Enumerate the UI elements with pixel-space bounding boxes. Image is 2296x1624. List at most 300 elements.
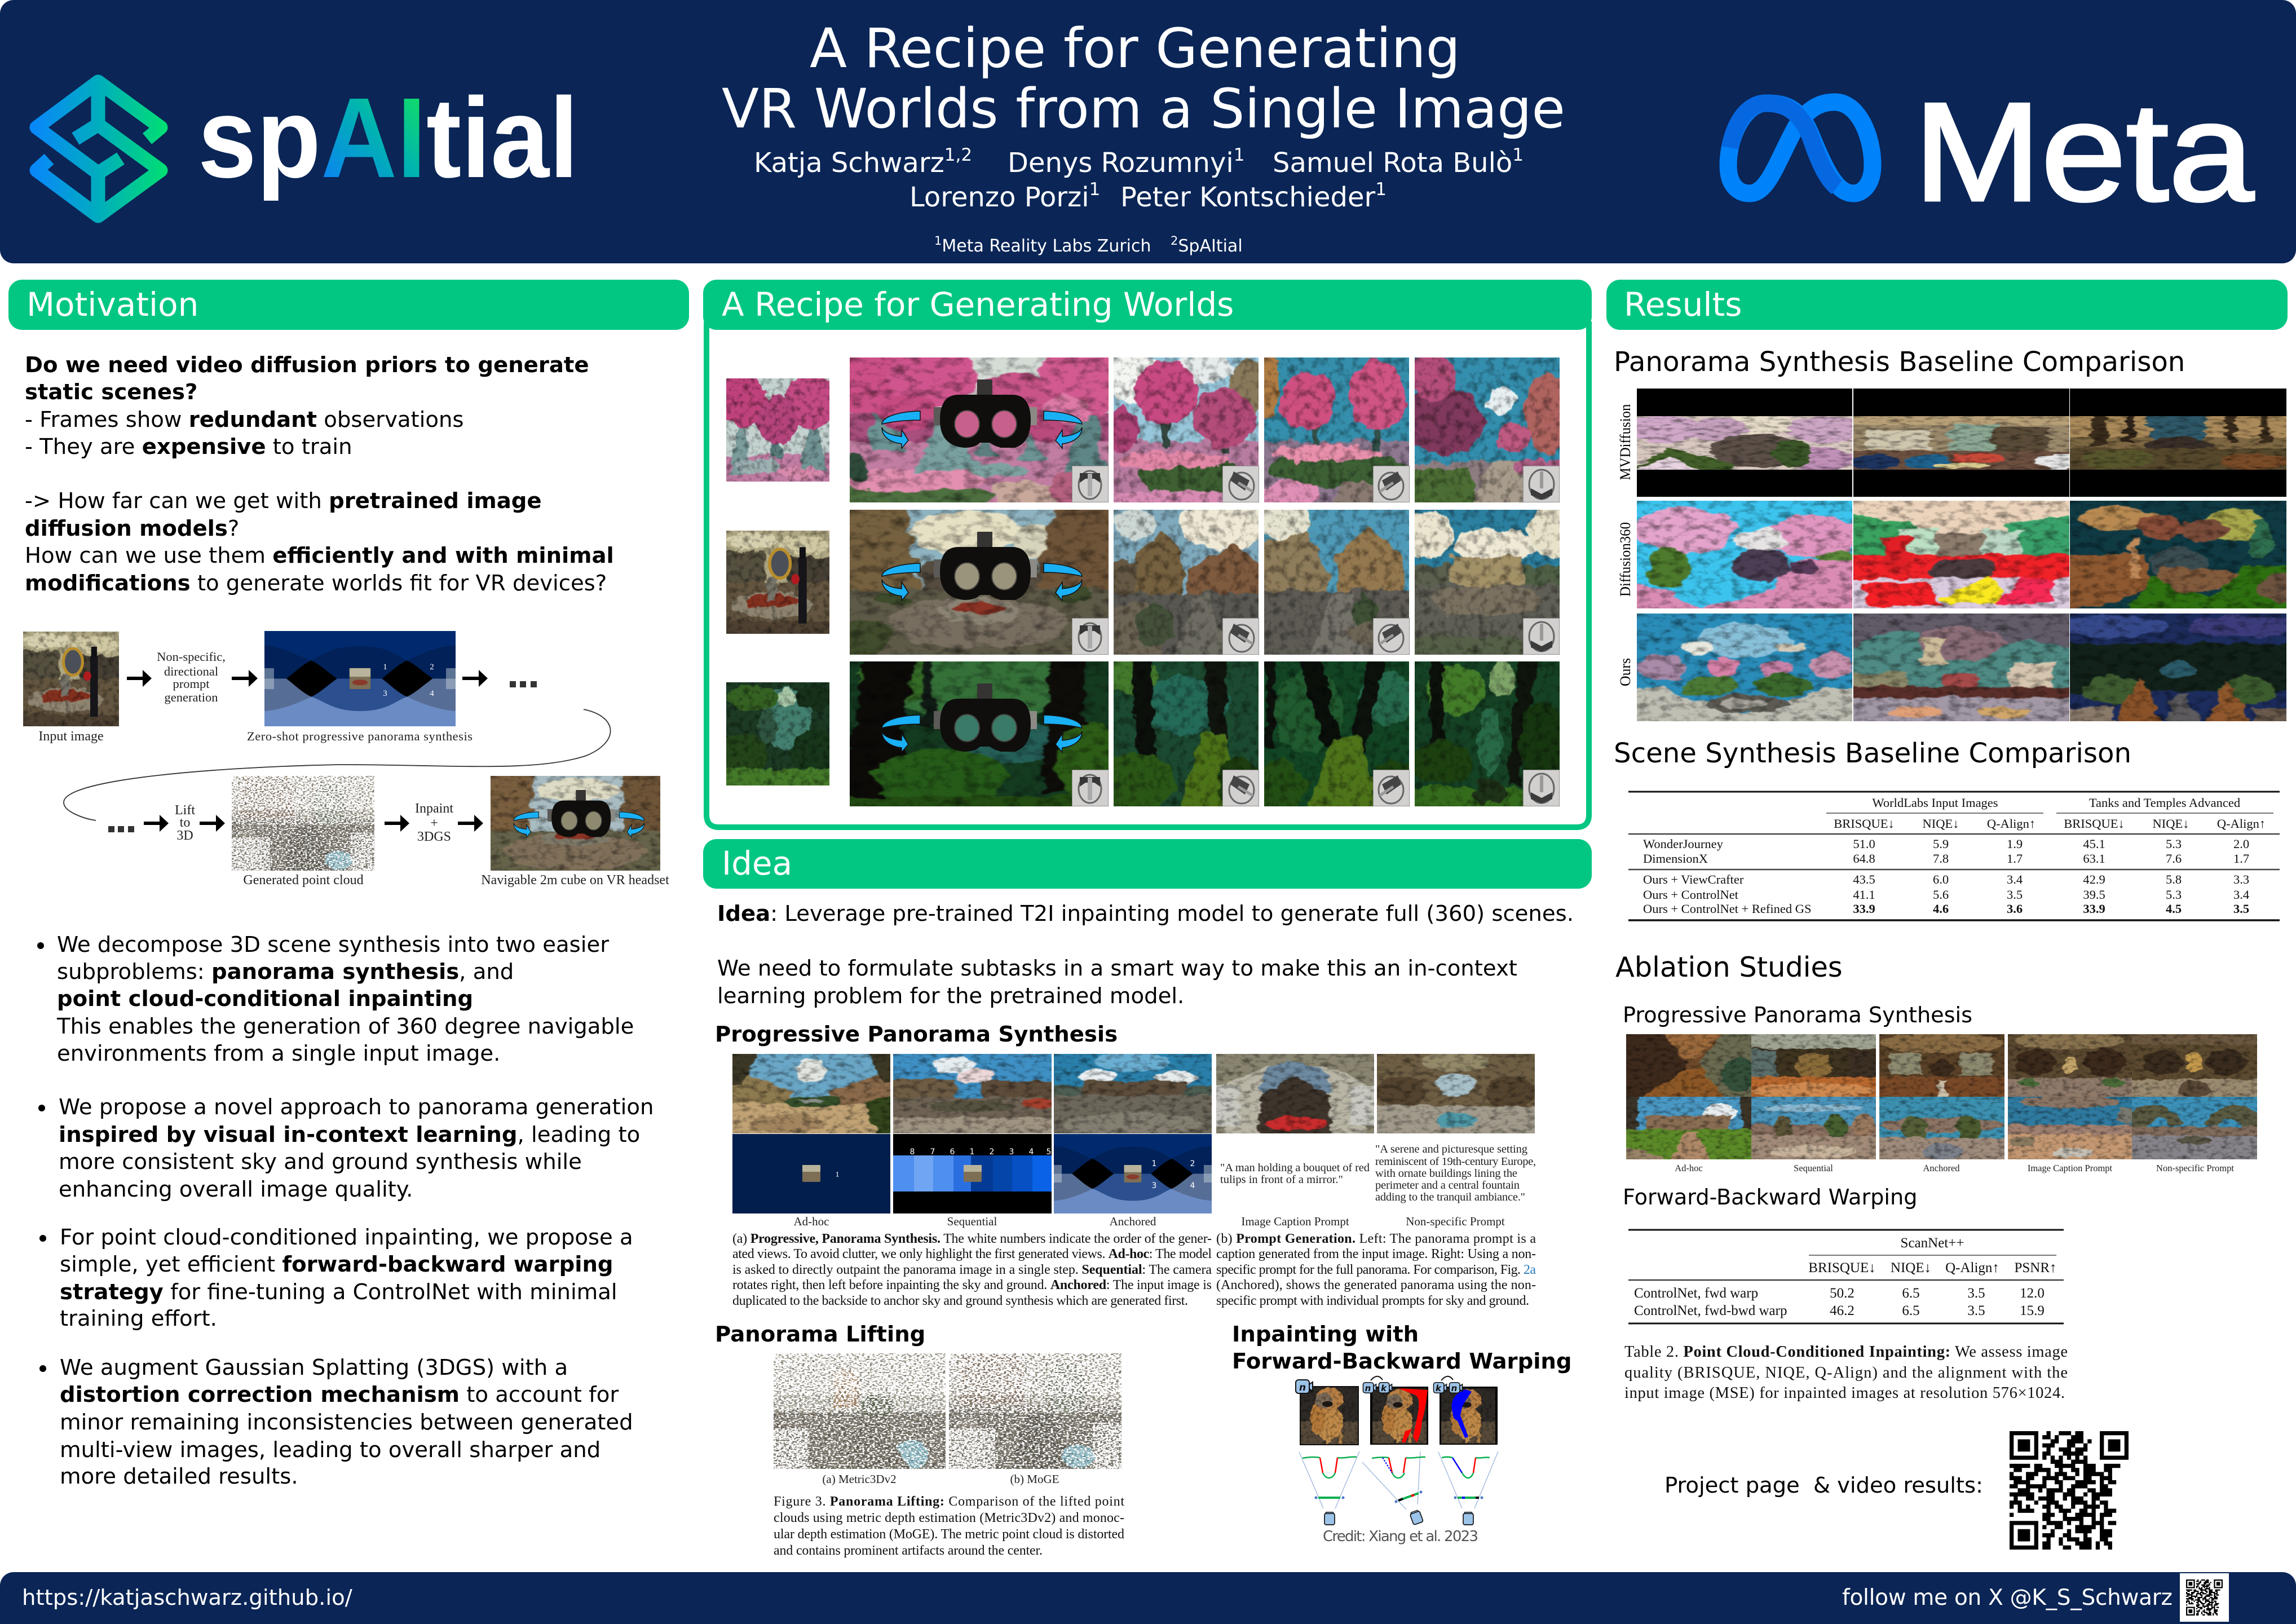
table: scene synthesis results: 43.5 [1853, 872, 1875, 886]
image: anchored mask: 3 [1152, 1181, 1156, 1190]
section heading: Results [1606, 280, 2288, 330]
affiliation: SpAItial: 2 [1171, 234, 1178, 248]
diagram: reference geometry [1299, 1451, 1359, 1508]
arrow [127, 670, 152, 687]
table: scene synthesis results: 5.3 [2166, 837, 2182, 851]
caption: figure 3: and contains prominent artifacts around the center. [774, 1543, 1043, 1558]
authors: 1,2 [944, 145, 972, 165]
sublabels: ablation: Image Caption Prompt [2028, 1163, 2113, 1173]
image: ablation sequential desert [1739, 1091, 1888, 1166]
image: input image [14, 622, 129, 736]
icon: cameras k n with arrow: k [1436, 1383, 1442, 1393]
table: scene synthesis results: 3.6 [2007, 902, 2023, 916]
table: scene synthesis results: WonderJourney [1643, 837, 1724, 851]
figure: panorama lifting [757, 1336, 1139, 1558]
caption: progressive panorama synthesis: ated views. To avoid clutter, we only highlight the first generated views. Ad-hoc: The model [732, 1247, 1212, 1261]
table: forward-backward warping: 6.5 [1902, 1303, 1920, 1318]
image: forest view 3 [1264, 661, 1409, 806]
figure: ablation panoramas [1614, 1028, 2269, 1173]
bullet: panorama generation: inspired by visual in-context learning, leading to [59, 1122, 640, 1148]
image grid: row 3 forest scene [716, 647, 1574, 821]
table: scene synthesis results: 3.3 [2233, 872, 2249, 886]
footer banner [0, 1572, 2296, 1624]
image: ablation caption prompt desert [1995, 1091, 2144, 1166]
label: prompt generation: directional [164, 664, 218, 678]
icon: cameras n k with arrow: k [1381, 1383, 1387, 1393]
sublabel: Metric3Dv2: (a) Metric3Dv2 [822, 1472, 897, 1486]
image: sequential mask: 3 [1009, 1148, 1014, 1157]
authors: Samuel Rota Bulò [1273, 147, 1512, 179]
image: forward warped dog with red holes [1367, 1383, 1432, 1449]
image: plaza view 4 [1415, 510, 1560, 655]
sublabels: variants: Non-specific Prompt [1406, 1215, 1505, 1228]
image: blossom view 4 [1415, 358, 1560, 502]
image: sequential mask: 8 [910, 1148, 915, 1157]
caption: table 2 [1624, 1343, 2068, 1402]
table: scene synthesis results: BRISQUE↓ [2064, 817, 2125, 831]
table: scene synthesis results: 4.6 [1933, 902, 1949, 916]
caption: figure 3: clouds using metric depth estimation (Metric3Dv2) and monoc- [774, 1511, 1124, 1525]
caption: prompt generation [1216, 1232, 1536, 1308]
arrow [462, 670, 488, 687]
wordmark: Meta: Meta [1914, 73, 2254, 230]
arrow [458, 815, 483, 832]
label: prompt generation: Non-specific, [157, 650, 226, 664]
sublabels: variants: Image Caption Prompt [1241, 1215, 1349, 1228]
arrow [144, 815, 169, 832]
sublabels: variants [794, 1215, 1505, 1228]
caption: progressive panorama synthesis: (a) Progressive, Panorama Synthesis. The white numbers indicate the order of the gener- [732, 1232, 1212, 1246]
label: lift to 3D [175, 803, 195, 843]
table: scene synthesis results: 51.0 [1853, 837, 1875, 851]
icon: cameras n k with arrow: n [1365, 1383, 1371, 1393]
bullet: decomposition: We decompose 3D scene synthesis into two easier [57, 932, 609, 957]
label: inpaint + 3DGS [415, 801, 453, 844]
authors: Denys Rozumnyi [1008, 147, 1234, 179]
icon: footer QR code [2180, 1573, 2229, 1622]
table: scene synthesis results: 1.9 [2007, 837, 2023, 851]
table: forward-backward warping: 15.9 [2020, 1303, 2045, 1318]
authors: 1 [1375, 179, 1387, 200]
footer link: https://katjaschwarz.github.io/ [22, 1585, 352, 1610]
bullet: panorama generation: enhancing overall image quality. [59, 1177, 413, 1202]
table: forward-backward warping: 6.5 [1902, 1286, 1920, 1301]
image: anchored mask [1054, 1134, 1212, 1213]
image: ablation non-specific desert [2120, 1091, 2269, 1166]
image: MVDiffusion forest [2048, 389, 2296, 497]
image grid: row 1 blossom scene [716, 340, 1574, 517]
caption: table 2: Table 2. Point Cloud-Conditioned Inpainting: We assess image [1624, 1343, 2068, 1361]
table: forward-backward warping: 50.2 [1830, 1286, 1855, 1301]
image: ad-hoc mask [732, 1134, 890, 1213]
table: scene synthesis results: 3.5 [2007, 888, 2023, 902]
table: scene synthesis results: 5.3 [2166, 888, 2182, 902]
label: lift to 3D: to [180, 815, 190, 830]
sublabels: variants: Sequential [947, 1215, 997, 1228]
caption: navigable cube: Navigable 2m cube on VR headset [481, 873, 669, 888]
image: ablation non-specific library [2120, 1028, 2269, 1103]
subheading: Progressive Panorama Synthesis: Progressive Panorama Synthesis [1623, 1003, 1972, 1028]
wordmark: spAItial: spAItial [198, 74, 579, 201]
image grid: row 2 plaza scene [716, 495, 1574, 669]
label: inpaint + 3DGS: + [430, 816, 438, 831]
table: scene synthesis results: DimensionX [1643, 851, 1708, 866]
text block: idea statement [717, 901, 1574, 1009]
table: scene synthesis results: 2.0 [2233, 837, 2249, 851]
image: Ours room [1832, 603, 2091, 732]
label: prompt generation: generation [165, 690, 218, 704]
pipeline diagram [14, 622, 677, 888]
table: forward-backward warping: ScanNet++ [1901, 1235, 1964, 1251]
table: forward-backward warping: 3.5 [1967, 1286, 1985, 1301]
table: scene synthesis results: 3.5 [2233, 902, 2249, 916]
caption: panorama synthesis: Zero-shot progressive panorama synthesis [247, 729, 473, 743]
table: scene synthesis results: 41.1 [1853, 888, 1875, 902]
section heading: Idea: Idea [722, 844, 792, 882]
image: plaza main view [850, 510, 1109, 655]
sublabels: ablation: Sequential [1794, 1163, 1833, 1173]
ellipsis [108, 826, 134, 832]
image: non-specific prompt panorama [1361, 1046, 1551, 1141]
image: forest view 2 [1114, 661, 1259, 806]
table: scene synthesis results: 5.6 [1933, 888, 1949, 902]
bullet: decomposition [37, 932, 634, 1066]
image: plaza view 3 [1264, 510, 1409, 655]
section heading: Motivation [8, 280, 689, 330]
image: MVDiffusion room [1832, 389, 2091, 497]
image: ablation anchored desert [1867, 1091, 2017, 1166]
authors: Katja Schwarz [754, 147, 944, 179]
image: sequential mask: 6 [950, 1148, 955, 1157]
authors [754, 145, 1524, 213]
bullet: inpainting: training effort. [60, 1306, 217, 1331]
caption: point cloud: Generated point cloud [243, 873, 364, 888]
credit: Credit: Xiang et al. 2023 [1323, 1528, 1478, 1545]
text block: questions: static scenes? [25, 379, 197, 405]
image: blossom input [726, 378, 829, 482]
icon: Meta infinity loop [1728, 102, 1873, 193]
header banner [0, 0, 2296, 263]
image: anchored panorama mask [264, 631, 456, 726]
table: scene synthesis results: 45.1 [2083, 837, 2105, 851]
caption text: non-specific prompt: with ornate buildings lining the [1375, 1167, 1517, 1180]
bullet: 3DGS: We augment Gaussian Splatting (3DGS) with a [60, 1355, 568, 1380]
title: A Recipe for Generating [810, 16, 1460, 80]
caption text: non-specific prompt: perimeter and a central fountain [1375, 1179, 1520, 1191]
icon: camera k tilted [1410, 1510, 1423, 1525]
image: anchored panorama mask: 3 [383, 689, 387, 698]
table: scene synthesis results: Ours + ViewCrafter [1643, 872, 1744, 886]
image: source dog view [1295, 1381, 1364, 1450]
icon: cameras n k with arrow [1363, 1376, 1392, 1393]
image: MVDiffusion blossom [1615, 389, 1874, 497]
image: anchored mask: 1 [1152, 1159, 1156, 1168]
section heading: Motivation: Motivation [27, 285, 198, 324]
bullet: panorama generation [38, 1095, 654, 1202]
footer handle: follow me on X @K_S_Schwarz [1842, 1585, 2173, 1610]
text block: questions: How can we use them efficiently and with minimal [25, 543, 614, 568]
table: scene synthesis results: BRISQUE↓ [1834, 817, 1895, 831]
table: forward-backward warping: Q-Align↑ [1945, 1260, 1999, 1276]
caption text: non-specific prompt: reminiscent of 19th-century Europe, [1375, 1155, 1536, 1168]
panel border [707, 321, 1589, 827]
bullet: decomposition: point cloud-conditional inpainting [57, 986, 473, 1012]
authors: Lorenzo Porzi [909, 182, 1089, 213]
label: lift to 3D: Lift [175, 803, 195, 818]
text block: idea statement: Idea: Leverage pre-trained T2I inpainting model to generate full (360) scenes. [717, 901, 1574, 926]
image: forest view 4 [1415, 661, 1560, 806]
bullet: inpainting: simple, yet efficient forward-backward warping [60, 1252, 613, 1277]
subheading: Forward-Backward Warping: Forward-Backward Warping [1623, 1185, 1917, 1210]
table: forward-backward warping: PSNR↑ [2014, 1260, 2057, 1276]
caption: figure 3: ular depth estimation (MoGE). The metric point cloud is distorted [774, 1527, 1124, 1542]
heading: Panorama Lifting: Panorama Lifting [715, 1322, 925, 1347]
row label: Ours: Ours [1617, 658, 1633, 686]
arrow [200, 815, 225, 832]
bullet: decomposition: environments from a single input image. [57, 1041, 500, 1066]
table: scene synthesis results: 5.9 [1933, 837, 1949, 851]
text block: idea statement: We need to formulate subtasks in a smart way to make this an in-context [717, 956, 1517, 981]
table: scene synthesis results: 64.8 [1853, 851, 1875, 866]
image: ablation ad-hoc fantasy [1614, 1091, 1764, 1166]
table: scene synthesis results: 5.8 [2166, 872, 2182, 886]
label: lift to 3D: 3D [176, 828, 193, 843]
text block: questions [25, 352, 614, 596]
sublabels: ablation [1675, 1163, 2234, 1173]
section heading: recipe: A Recipe for Generating Worlds [722, 285, 1234, 324]
bullet: inpainting [39, 1225, 633, 1331]
panel: Results [1606, 280, 2296, 1547]
image: sequential mask [893, 1134, 1052, 1213]
icon: view insets row 1 [1072, 466, 1560, 502]
image: image caption prompt panorama [1200, 1046, 1390, 1141]
table: scene synthesis results: 39.5 [2083, 888, 2105, 902]
caption: prompt generation: specific prompt with individual prompts for sky and ground. [1216, 1294, 1529, 1308]
image: ablation ad-hoc library [1614, 1028, 1764, 1103]
caption: figure 3 [774, 1494, 1124, 1558]
label: project page: Project page & video results: [1664, 1473, 1983, 1498]
table: forward-backward warping: 12.0 [2020, 1286, 2045, 1301]
caption text: image caption prompt: tulips in front of a mirror." [1220, 1173, 1343, 1186]
table: scene synthesis results: Q-Align↑ [2217, 817, 2266, 831]
icon: headset overlay row 1 [882, 379, 1082, 448]
title [722, 16, 1565, 140]
icon: camera below warped-back [1463, 1512, 1473, 1525]
panel: Motivation [8, 280, 689, 1489]
caption: prompt generation: (b) Prompt Generation. Left: The panorama prompt is a [1216, 1232, 1536, 1246]
table: scene synthesis results: Ours + ControlNet + Refined GS [1643, 902, 1811, 916]
caption text: non-specific prompt: "A serene and picturesque setting [1375, 1143, 1527, 1155]
bullet: decomposition: This enables the generation of 360 degree navigable [56, 1014, 634, 1039]
image: ablation anchored library [1867, 1028, 2017, 1103]
section heading: Results: Results [1624, 285, 1742, 324]
image: anchored panorama mask: 4 [430, 689, 434, 698]
table: scene synthesis results [1628, 792, 2280, 920]
image: forest input [726, 682, 829, 785]
icon: spAItial hexagon mark [37, 82, 161, 216]
bullet: 3DGS: more detailed results. [60, 1464, 298, 1489]
bullet: inpainting: For point cloud-conditioned inpainting, we propose a [60, 1225, 633, 1250]
caption: prompt generation: specific prompt for the full panorama. For comparison, Fig. 2a [1216, 1263, 1536, 1277]
table: forward-backward warping: 3.5 [1967, 1303, 1985, 1318]
icon: camera n: n [1299, 1382, 1306, 1393]
text block: questions: modifications to generate worlds fit for VR devices? [25, 571, 607, 596]
heading: Ablation Studies: Ablation Studies [1615, 951, 1843, 983]
affiliation: SpAItial: SpAItial [1178, 236, 1243, 256]
image: MoGE point cloud [931, 1336, 1139, 1486]
heading: Progressive Panorama Synthesis: Progressive Panorama Synthesis [715, 1022, 1118, 1047]
label: prompt generation [157, 650, 226, 704]
heading: Panorama Synthesis Baseline Comparison: Panorama Synthesis Baseline Comparison [1614, 346, 2185, 378]
sublabels: variants: Ad-hoc [794, 1215, 829, 1228]
table: scene synthesis results: NIQE↓ [2153, 817, 2189, 831]
table: scene synthesis results: 63.1 [2083, 851, 2105, 866]
affiliations: Meta Reality Labs Zurich [942, 236, 1151, 256]
authors: 1 [1512, 145, 1524, 165]
image: sequential mask: 4 [1029, 1148, 1034, 1157]
caption: table 2: quality (BRISQUE, NIQE, Q-Align) and the alignment with the [1624, 1364, 2068, 1382]
icon: cameras k n with arrow: n [1451, 1383, 1457, 1393]
text block: questions: - They are expensive to train [25, 434, 352, 460]
bullet: decomposition: subproblems: panorama synthesis, and [57, 959, 514, 985]
caption text: image caption prompt [1220, 1162, 1370, 1186]
table: scene synthesis results: 1.7 [2233, 851, 2249, 866]
label: inpaint + 3DGS: 3DGS [417, 829, 451, 844]
sublabel: MoGE: (b) MoGE [1010, 1472, 1059, 1486]
caption text: non-specific prompt: adding to the tranquil ambiance." [1375, 1191, 1525, 1203]
image: Ours forest [2048, 603, 2296, 732]
table: scene synthesis results: 42.9 [2083, 872, 2105, 886]
table: scene synthesis results: 7.6 [2166, 851, 2182, 866]
text block: questions: - Frames show redundant observations [25, 407, 464, 433]
table: scene synthesis results: Tanks and Temples Advanced [2089, 796, 2240, 810]
image: sequential mask: 2 [990, 1148, 994, 1157]
heading: Scene Synthesis Baseline Comparison: Scene Synthesis Baseline Comparison [1614, 738, 2131, 769]
icon: camera n [1296, 1380, 1313, 1393]
title: VR Worlds from a Single Image [722, 77, 1565, 140]
table: scene synthesis results: 33.9 [2083, 902, 2105, 916]
figure: forward-backward warping [1295, 1376, 1501, 1545]
caption: progressive panorama synthesis: rotates right, then left before inpainting the sky and ground. Anchored: The input image is [732, 1278, 1212, 1292]
image: Ours blossom [1615, 603, 1874, 732]
text block: idea statement: learning problem for the pretrained model. [717, 983, 1184, 1009]
icon: headset overlay row 3 [882, 683, 1082, 752]
icon: cameras k n with arrow [1433, 1376, 1463, 1393]
image: blossom view 2 [1114, 358, 1259, 502]
arrow [232, 670, 258, 687]
diagram: warped geometry [1362, 1451, 1425, 1510]
table: forward-backward warping: ControlNet, fwd warp [1634, 1286, 1758, 1301]
image: Diffusion360 room [1832, 490, 2091, 619]
authors: 1 [1089, 179, 1100, 200]
bullet: 3DGS: minor remaining inconsistencies between generated [60, 1410, 633, 1435]
caption: progressive panorama synthesis: is asked to directly outpaint the panorama image in a single step. Sequential: The camera [732, 1263, 1212, 1277]
table: forward-backward warping: NIQE↓ [1891, 1260, 1931, 1276]
image: plaza view 2 [1114, 510, 1259, 655]
bullet: 3DGS: distortion correction mechanism to account for [60, 1382, 619, 1407]
icon: camera below reference [1324, 1512, 1335, 1525]
table: scene synthesis results: Q-Align↑ [1987, 817, 2036, 831]
table: scene synthesis results: Ours + ControlNet [1643, 888, 1739, 902]
table: forward-backward warping: BRISQUE↓ [1808, 1260, 1876, 1276]
icon: headset overlay [514, 790, 644, 837]
bullet: 3DGS [39, 1355, 633, 1489]
table: scene synthesis results: 4.5 [2166, 902, 2182, 916]
caption text: non-specific prompt [1375, 1143, 1536, 1203]
image: blossom view 3 [1264, 358, 1409, 502]
icon: headset overlay row 2 [882, 532, 1082, 601]
image: forest main view [850, 661, 1109, 806]
caption: table 2: input image (MSE) for inpainted images at resolution 576×1024. [1624, 1384, 2065, 1402]
image: Metric3Dv2 point cloud [757, 1336, 963, 1486]
caption text: image caption prompt: "A man holding a bouquet of red [1220, 1162, 1370, 1174]
table: scene synthesis results: WorldLabs Input Images [1872, 796, 1998, 810]
sublabels: variants: Anchored [1110, 1215, 1156, 1228]
panel: A Recipe for Generating Worlds [703, 280, 1592, 827]
caption: progressive panorama synthesis: duplicated to the backside to anchor sky and ground synthesis which are generated first. [732, 1294, 1188, 1308]
table: scene synthesis results: 3.4 [2233, 888, 2249, 902]
image: plaza input [716, 520, 840, 644]
sublabels: ablation: Anchored [1923, 1163, 1960, 1173]
logo: spAItial [37, 74, 579, 216]
figure: panorama comparison [717, 1046, 1551, 1308]
bullet: panorama generation: We propose a novel approach to panorama generation [59, 1095, 654, 1120]
image: ablation sequential library [1739, 1028, 1888, 1103]
sublabels: ablation: Non-specific Prompt [2156, 1163, 2234, 1173]
row label: MVDiffusion: MVDiffusion [1617, 404, 1633, 480]
section heading: recipe [703, 280, 1592, 330]
caption: input image: Input image [38, 729, 104, 744]
connector curve [64, 709, 611, 820]
caption: figure 3: Figure 3. Panorama Lifting: Comparison of the lifted point [774, 1494, 1124, 1509]
image: anchored panorama [1038, 1046, 1228, 1141]
image: ad-hoc panorama [717, 1046, 906, 1141]
table: forward-backward warping [1628, 1230, 2064, 1323]
sublabels: ablation: Ad-hoc [1675, 1163, 1703, 1173]
row label: Diffusion360: Diffusion360 [1617, 522, 1633, 597]
caption: progressive panorama synthesis [732, 1232, 1212, 1308]
ellipsis [510, 681, 537, 687]
authors: Peter Kontschieder [1120, 182, 1375, 213]
icon: view insets row 3 [1072, 770, 1560, 806]
image: anchored panorama mask: 1 [383, 663, 387, 672]
image: Diffusion360 blossom [1615, 490, 1874, 619]
table: scene synthesis results: 6.0 [1933, 872, 1949, 886]
image: anchored mask: 4 [1190, 1181, 1195, 1190]
image: sequential panorama [877, 1046, 1067, 1141]
image: generated point cloud [218, 762, 388, 885]
image: ablation caption prompt library [1995, 1028, 2144, 1103]
table: scene synthesis results: 3.4 [2007, 872, 2023, 886]
image: blossom main view [850, 358, 1109, 502]
label: prompt generation: prompt [173, 677, 210, 691]
arrow [385, 815, 409, 832]
table: scene synthesis results: 1.7 [2007, 851, 2023, 866]
heading: Inpainting with Forward-Backward Warping: Forward-Backward Warping [1232, 1349, 1572, 1374]
table: forward-backward warping: 46.2 [1830, 1303, 1855, 1318]
image: backward warped dog with blue holes [1436, 1383, 1501, 1449]
text block: questions: Do we need video diffusion priors to generate [25, 352, 589, 378]
affiliations: 1 [934, 234, 942, 248]
icon: view insets row 2 [1072, 618, 1560, 655]
image: ad-hoc mask: 1 [836, 1171, 839, 1179]
caption: prompt generation: caption generated from the input image. Right: Using a non- [1216, 1247, 1536, 1261]
table: scene synthesis results: 7.8 [1933, 851, 1949, 866]
authors: 1 [1234, 145, 1244, 165]
diagram: warped-back geometry [1438, 1451, 1498, 1508]
image: anchored panorama mask: 2 [430, 663, 434, 672]
section heading: Idea [703, 839, 1592, 889]
